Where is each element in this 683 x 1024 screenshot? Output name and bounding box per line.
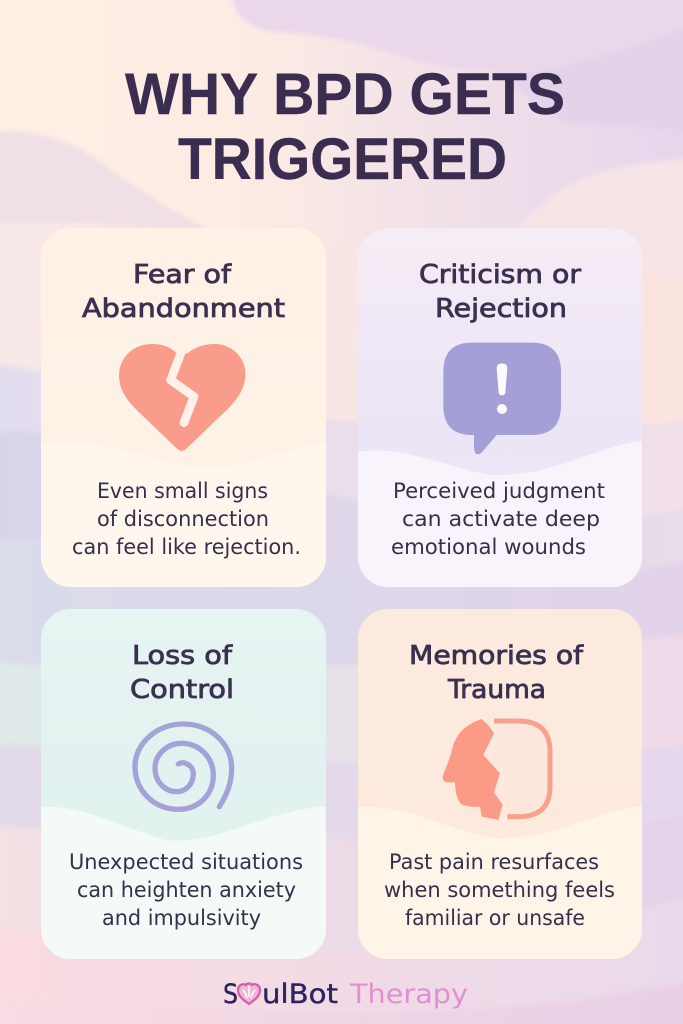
body text: emotional wounds (391, 535, 586, 559)
body text: familiar or unsafe (405, 906, 585, 930)
panel: criticism or rejection (358, 228, 642, 587)
body text: when something feels (384, 878, 615, 902)
heading: Loss of (132, 641, 233, 671)
logo: SoulBot Therapy (223, 979, 468, 1010)
icon: brain heart (238, 984, 260, 1004)
title: WHY BPD GETS (125, 62, 565, 127)
body text: can feel like rejection. (72, 535, 301, 559)
body text (69, 850, 303, 930)
heading: Criticism or (419, 260, 581, 290)
heading (82, 260, 285, 324)
heading: Control (130, 675, 234, 705)
icon: speech bubble with exclamation (443, 343, 561, 454)
body text: can heighten anxiety (77, 878, 296, 902)
body text: and impulsivity (102, 906, 261, 930)
title (125, 62, 565, 192)
body text (72, 479, 301, 559)
heading (130, 641, 234, 705)
logo: SoulBot Therapy: ulBot (262, 979, 338, 1010)
heading: Memories of (409, 641, 584, 671)
title: TRIGGERED (178, 127, 507, 192)
body text (384, 850, 615, 930)
panel: fear of abandonment (41, 228, 326, 587)
panel: loss of control (41, 609, 326, 959)
icon: split face (443, 719, 550, 820)
body text (391, 479, 605, 559)
heading (419, 260, 581, 324)
body text: can activate deep (402, 507, 600, 531)
heading: Abandonment (82, 294, 285, 324)
panel: memories of trauma (358, 609, 642, 959)
body text: Perceived judgment (393, 479, 605, 503)
heading: Rejection (435, 294, 567, 324)
body text: Unexpected situations (69, 850, 303, 874)
heading: Fear of (133, 260, 232, 290)
heading (409, 641, 584, 705)
body text: of disconnection (97, 507, 269, 531)
logo: SoulBot Therapy: S (223, 979, 238, 1010)
icon: broken heart (119, 344, 245, 451)
heading: Trauma (447, 675, 546, 705)
body text: Past pain resurfaces (389, 850, 599, 874)
icon: spiral (135, 724, 232, 809)
logo: SoulBot Therapy: Therapy (349, 979, 468, 1010)
body text: Even small signs (97, 479, 268, 503)
